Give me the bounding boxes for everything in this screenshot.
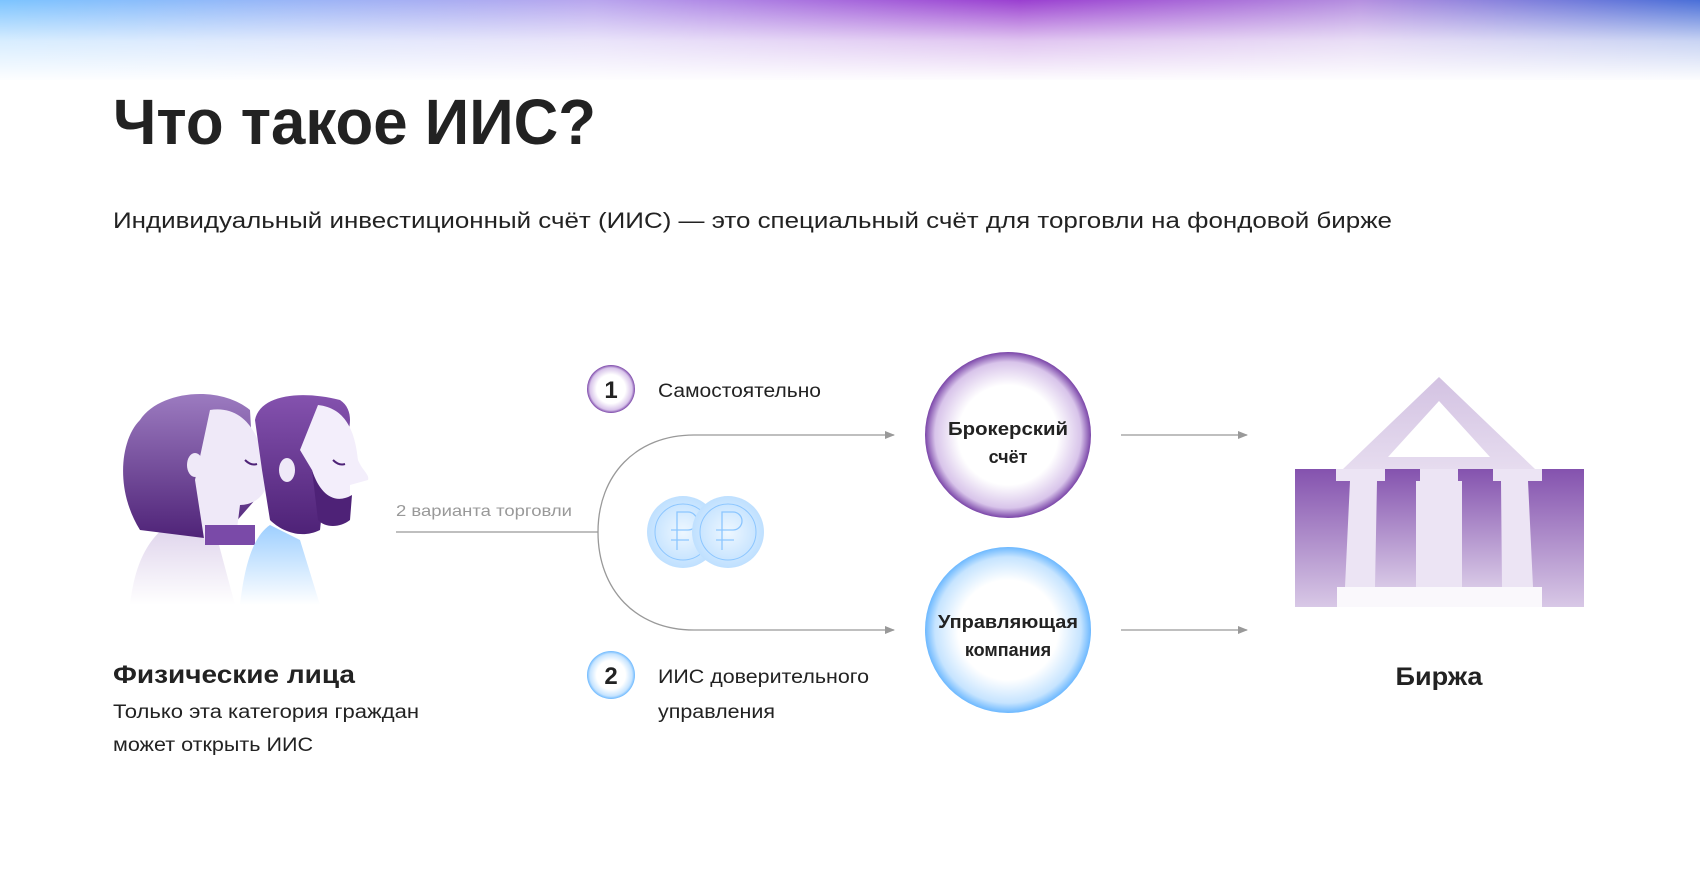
icon: ruble coins	[647, 496, 764, 568]
text block: individuals: Физические лица	[113, 661, 356, 689]
badge 1: 1	[604, 377, 618, 404]
label: 2 variants: 2 варианта торговли	[396, 503, 572, 520]
subtitle: Индивидуальный инвестиционный счёт (ИИС) — это специальный счёт для торговли на фондовой бирже	[113, 208, 1392, 233]
title: Что такое ИИС?	[113, 86, 596, 158]
option 1 text: Самостоятельно	[658, 381, 821, 402]
icon: two people profiles	[123, 394, 368, 605]
circle: broker account: Брокерский	[948, 419, 1068, 439]
text block: individuals	[113, 661, 419, 756]
badge 2: 2	[604, 663, 618, 690]
label: exchange: Биржа	[1396, 663, 1484, 691]
circle: broker account: счёт	[989, 447, 1028, 467]
circle: management company: компания	[965, 640, 1051, 660]
connector lines with arrows	[396, 435, 1247, 630]
circle: broker account	[925, 352, 1091, 518]
badge 2	[587, 651, 635, 699]
text block: individuals: может открыть ИИС	[113, 735, 313, 756]
text block: individuals: Только эта категория граждан	[113, 702, 419, 723]
option 2 text	[658, 667, 869, 723]
option 2 text: управления	[658, 702, 775, 723]
icon: exchange building	[1295, 377, 1584, 607]
top gradient band	[0, 0, 1700, 82]
option 2 text: ИИС доверительного	[658, 667, 869, 688]
badge 1	[587, 365, 635, 413]
circle: management company	[925, 547, 1091, 713]
circle: management company: Управляющая	[938, 612, 1078, 632]
